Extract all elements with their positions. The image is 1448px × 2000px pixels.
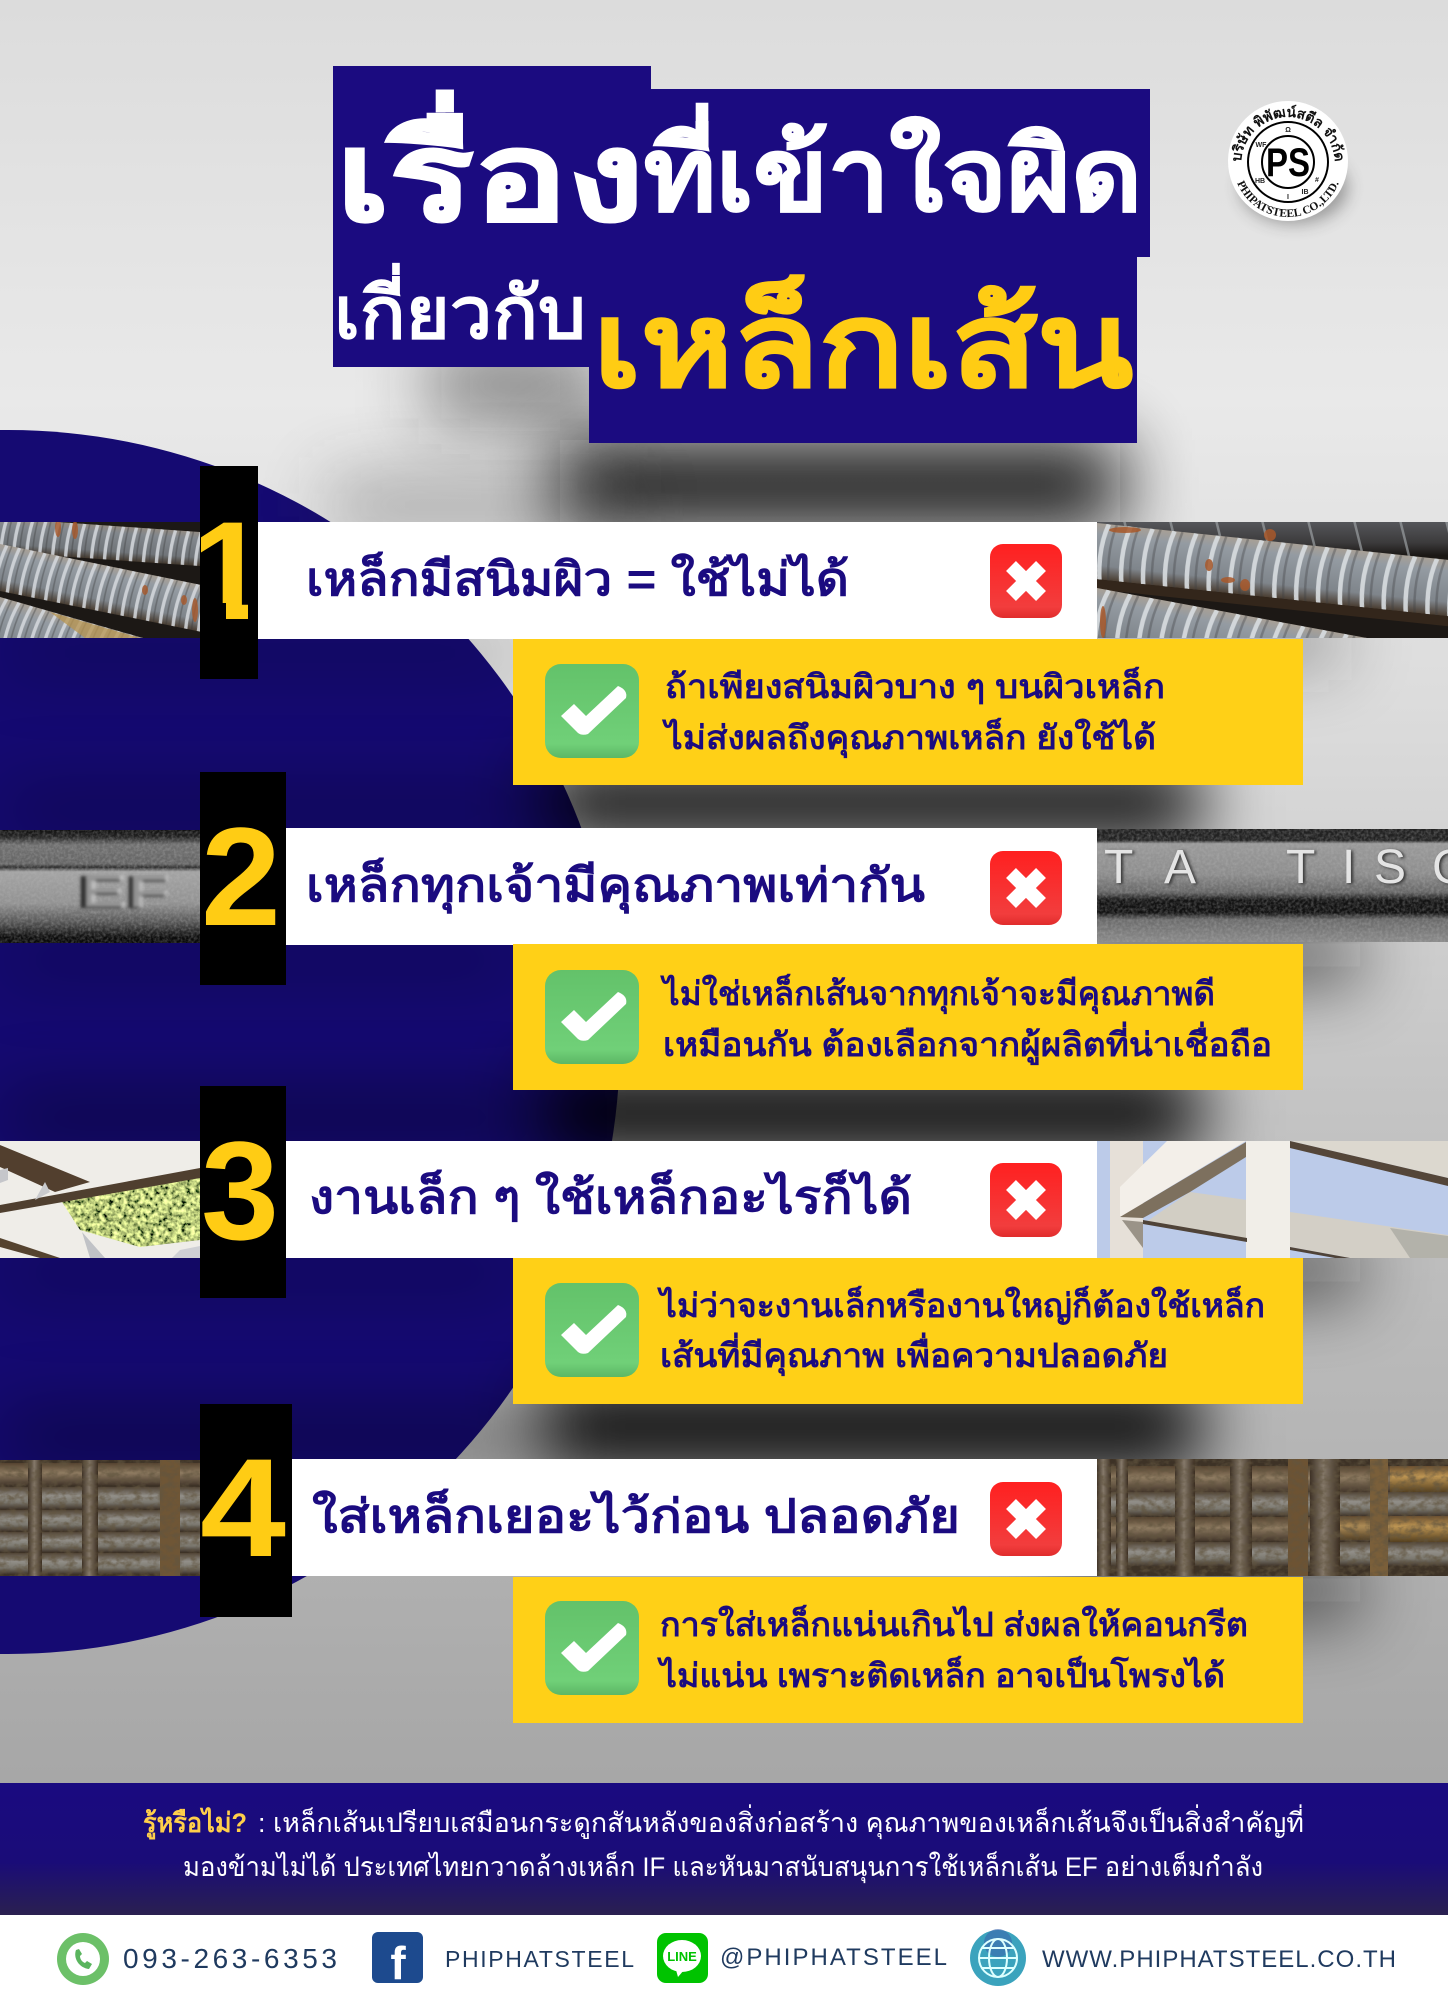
item 1 question: เหล็กมีสนิมผิว = ใช้ไม่ได้ xyxy=(306,551,849,605)
phone number: 093-263-6353 xyxy=(123,1943,337,1974)
logo: PS Phiphatsteel xyxy=(1228,101,1356,233)
item 1 answer xyxy=(662,666,1165,759)
logo: PS Phiphatsteel: PS xyxy=(1266,141,1310,185)
item 4 answer xyxy=(657,1604,1248,1694)
panel: item 4 xyxy=(200,1404,1303,1723)
icon: red cross xyxy=(990,544,1062,618)
photo: rebar cage right xyxy=(1097,1459,1448,1576)
item 2 number block xyxy=(200,772,286,985)
item 3 question bar xyxy=(286,1141,1097,1258)
item 4 answer panel xyxy=(513,1577,1303,1723)
line id: @PHIPHATSTEEL xyxy=(720,1944,947,1971)
title: ที่เข้าใจผิด xyxy=(644,103,1142,232)
icon: green check xyxy=(545,1601,639,1695)
item 2 answer xyxy=(660,973,1272,1066)
did you know text: รู้หรือไม่? xyxy=(143,1807,247,1840)
icon: globe xyxy=(970,1929,1026,1986)
item 4 answer: ไม่แน่น เพราะติดเหล็ก อาจเป็นโพรงได้ xyxy=(657,1655,1225,1694)
contact footer xyxy=(0,1915,1448,2000)
icon: red cross xyxy=(990,1482,1062,1556)
panel: item 1 xyxy=(190,466,1303,785)
logo: PS Phiphatsteel: # xyxy=(1315,177,1319,184)
photo: embossed rebar left xyxy=(0,830,205,943)
item 4 question bar xyxy=(292,1459,1097,1576)
title xyxy=(334,90,1142,412)
item 1 answer panel xyxy=(513,639,1303,785)
item 2 number: 2 xyxy=(201,798,281,955)
logo: PS Phiphatsteel: บริษัท พิพัฒน์สตีล จำกัด xyxy=(1232,104,1345,162)
title block backing xyxy=(333,66,1150,443)
logo: PS Phiphatsteel: WF xyxy=(1256,142,1267,149)
icon: green check xyxy=(545,664,639,758)
item 2 answer panel xyxy=(513,944,1303,1090)
item 2 question: เหล็กทุกเจ้ามีคุณภาพเท่ากัน xyxy=(306,857,926,914)
item 1 answer: ไม่ส่งผลถึงคุณภาพเหล็ก ยังใช้ได้ xyxy=(662,717,1156,759)
did you know text xyxy=(143,1804,1304,1884)
did you know text: มองข้ามไม่ได้ ประเทศไทยกวาดล้างเหล็ก IF และหันมาสนับสนุนการใช้เหล็กเส้น EF อย่างเต็มกำลัง xyxy=(183,1849,1263,1884)
navy circle backdrop xyxy=(0,430,620,1654)
item 3 answer panel xyxy=(513,1258,1303,1404)
icon: red cross xyxy=(990,1163,1062,1237)
item 2 answer: ไม่ใช่เหล็กเส้นจากทุกเจ้าจะมีคุณภาพดี xyxy=(660,973,1215,1015)
item 3 number block xyxy=(200,1086,286,1298)
website: WWW.PHIPHATSTEEL.CO.TH xyxy=(1042,1946,1396,1973)
item 3 answer xyxy=(657,1285,1265,1377)
photo: concrete frame left xyxy=(0,1141,205,1258)
item 3 answer: ไม่ว่าจะงานเล็กหรืองานใหญ่ก็ต้องใช้เหล็ก xyxy=(657,1285,1265,1325)
item 4 question: ใส่เหล็กเยอะไว้ก่อน ปลอดภัย xyxy=(312,1488,960,1542)
photo: rebar cage left xyxy=(0,1460,205,1576)
panel: item 2 xyxy=(200,772,1303,1090)
photo: embossed rebar left: EF xyxy=(81,865,171,917)
facebook name: PHIPHATSTEEL xyxy=(445,1946,634,1972)
icon: phone xyxy=(57,1933,109,1985)
item 2 answer: เหมือนกัน ต้องเลือกจากผู้ผลิตที่น่าเชื่อถือ xyxy=(663,1021,1272,1066)
logo: PS Phiphatsteel: Ω xyxy=(1285,127,1291,134)
photo: rusty rebar left xyxy=(0,522,200,638)
panel: item 3 xyxy=(200,1086,1303,1404)
item 4 number: 4 xyxy=(200,1429,286,1586)
item 3 answer: เส้นที่มีคุณภาพ เพื่อความปลอดภัย xyxy=(660,1332,1168,1377)
item 4 answer: การใส่เหล็กแน่นเกินไป ส่งผลให้คอนกรีต xyxy=(660,1604,1248,1643)
item 1 answer: ถ้าเพียงสนิมผิวบาง ๆ บนผิวเหล็ก xyxy=(665,666,1165,705)
photo: concrete frame right xyxy=(1097,1141,1448,1258)
icon: green check xyxy=(545,970,639,1064)
icon: facebook xyxy=(372,1932,423,1989)
did you know band xyxy=(0,1783,1448,1915)
logo: PS Phiphatsteel: IB xyxy=(1302,189,1308,196)
item 1 number: 1 xyxy=(190,492,268,649)
item 3 question: งานเล็ก ๆ ใช้เหล็กอะไรก็ได้ xyxy=(309,1169,912,1223)
did you know text: : เหล็กเส้นเปรียบเสมือนกระดูกสันหลังของสิ่งก่อสร้าง คุณภาพของเหล็กเส้นจึงเป็นสิ่งสำคัญที่ xyxy=(258,1804,1304,1840)
photo: embossed rebar right xyxy=(1097,829,1448,942)
photo: embossed rebar left: EF xyxy=(76,866,168,918)
logo: PS Phiphatsteel: HB xyxy=(1255,178,1265,185)
icon: green check xyxy=(545,1283,639,1377)
title: เกี่ยวกับ xyxy=(334,262,586,354)
item 1 number block xyxy=(200,466,258,679)
icon: facebook: f xyxy=(390,1937,406,1989)
item 4 number block xyxy=(200,1404,292,1617)
icon: red cross xyxy=(990,851,1062,925)
photo: rusty rebar right xyxy=(1097,522,1448,638)
title: เหล็กเส้น xyxy=(593,274,1133,412)
item 3 number: 3 xyxy=(201,1112,279,1269)
icon: line xyxy=(657,1933,708,1983)
item 1 question bar xyxy=(258,522,1097,639)
icon: line: LINE xyxy=(667,1949,697,1964)
drop shadows xyxy=(0,350,1360,1615)
item 2 question bar xyxy=(286,828,1097,945)
logo: PS Phiphatsteel: I xyxy=(1287,194,1289,201)
logo: PS Phiphatsteel: PHIPATSTEEL CO.,LTD. xyxy=(1237,180,1339,218)
title: เรื่อง xyxy=(336,90,644,247)
